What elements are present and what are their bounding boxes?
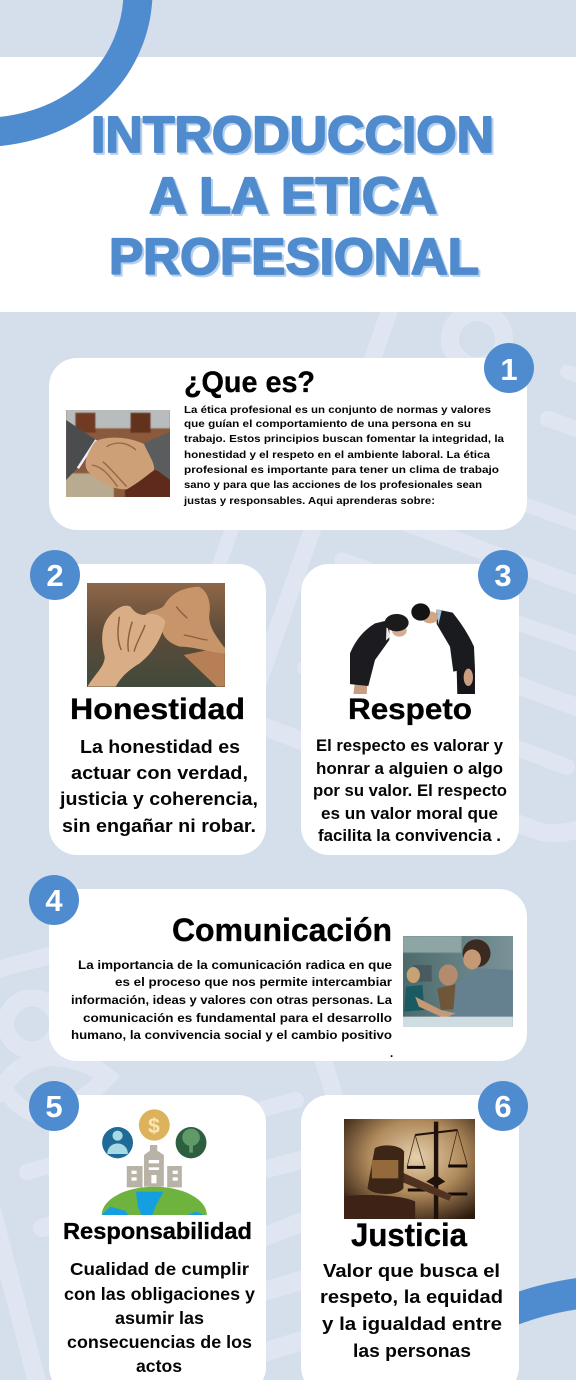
text block: honestidad: justicia y coherencia,: [59, 789, 258, 809]
title: INTRODUCCION: [91, 106, 494, 163]
text block: honestidad: sin engañar ni robar.: [62, 816, 256, 836]
card background: [49, 1095, 266, 1380]
text block: que es: profesional es importante para tener un clima de trabajo: [184, 465, 499, 476]
photo: two people bowing: [349, 603, 475, 695]
top corner arc: [0, 0, 138, 132]
text block: que es: que guían el comportamiento de una persona en su: [184, 419, 471, 430]
text block: justicia: Valor que busca el: [323, 1260, 500, 1281]
title: A LA ETICA: [149, 167, 437, 224]
text block: justicia: las personas: [353, 1340, 471, 1361]
panel: comunicacion: [29, 875, 527, 1061]
text block: responsabilidad: [64, 1259, 255, 1376]
text block: comunicacion: humano, la convivencia social y el cambio positivo: [71, 1030, 392, 1042]
text block: que es: justas y responsables. Aqui aprenderas sobre:: [183, 496, 435, 507]
text block: justicia: [320, 1260, 503, 1361]
card background: [301, 564, 519, 855]
title: [91, 106, 494, 285]
card background: [49, 358, 527, 530]
text block: comunicacion: .: [390, 1048, 393, 1060]
text block: que es: honestidad y el respeto en el ambiente laboral. La ética: [184, 450, 490, 461]
text block: honestidad: La honestidad es: [80, 737, 240, 757]
text block: que es: trabajo. Estos principios buscan fomentar la integridad, la: [184, 434, 504, 445]
text block: respeto: por su valor. El respecto: [313, 782, 507, 800]
panel: que es: [49, 343, 534, 530]
dollar sign: $: [148, 1115, 160, 1138]
badge 6: 6: [494, 1089, 512, 1124]
text block: responsabilidad: Cualidad de cumplir: [70, 1259, 249, 1279]
badge 2: [30, 550, 80, 600]
text block: justicia: respeto, la equidad: [320, 1286, 503, 1307]
text block: comunicacion: comunicación es fundamental para el desarrollo: [83, 1013, 392, 1025]
text block: responsabilidad: actos: [136, 1356, 182, 1376]
badge 6: [478, 1081, 528, 1131]
text block: comunicacion: información, ideas y valores con otras personas. La: [71, 995, 393, 1007]
photo: gavel and scales: [344, 1119, 475, 1219]
badge 5: [29, 1081, 79, 1131]
card background: [49, 564, 266, 855]
photo: pinky promise hands: [87, 583, 225, 687]
text block: respeto: El respecto es valorar y: [316, 737, 504, 755]
text block: responsabilidad: con las obligaciones y: [64, 1284, 255, 1304]
heading: respeto: Respeto: [348, 693, 472, 726]
panel: respeto: [301, 550, 528, 855]
heading: justicia: Justicia: [351, 1217, 467, 1253]
text block: responsabilidad: asumir las: [115, 1308, 204, 1328]
text block: justicia: y la igualdad entre: [322, 1313, 502, 1334]
text block: que es: sano y para que las acciones de los profesionales sean: [184, 480, 482, 491]
badge 3: [478, 550, 528, 600]
heading: comunicacion: Comunicación: [172, 912, 392, 948]
white title band: [0, 57, 576, 312]
text block: que es: [183, 405, 504, 507]
text block: comunicacion: La importancia de la comunicación radica en que: [78, 960, 392, 972]
badge 4: 4: [45, 883, 63, 918]
badge 1: 1: [500, 352, 518, 387]
photo: handshake: [66, 410, 170, 497]
card background: [301, 1095, 519, 1380]
badge 2: 2: [46, 558, 64, 593]
background pattern: [0, 295, 576, 1380]
heading: responsabilidad: Responsabilidad: [63, 1218, 252, 1244]
panel: justicia: [301, 1081, 528, 1380]
text block: respeto: facilita la convivencia .: [318, 827, 501, 845]
panel: honestidad: [30, 550, 266, 855]
text block: que es: La ética profesional es un conjunto de normas y valores: [184, 405, 491, 416]
text block: honestidad: actuar con verdad,: [71, 763, 248, 783]
text block: comunicacion: [71, 960, 393, 1060]
bottom right arc: [490, 1292, 576, 1320]
badge 1: [484, 343, 534, 393]
text block: responsabilidad: consecuencias de los: [67, 1332, 252, 1352]
heading: honestidad: Honestidad: [70, 693, 245, 726]
icon: globe with buildings and circles: [102, 1109, 207, 1215]
panel: responsabilidad: [29, 1081, 266, 1380]
photo: business meeting: [403, 936, 513, 1027]
text block: honestidad: [59, 737, 258, 836]
title: PROFESIONAL: [109, 228, 479, 285]
heading: que es: ¿Que es?: [184, 366, 315, 399]
text block: comunicacion: es el proceso que nos permite intercambiar: [115, 977, 393, 989]
text block: respeto: honrar a alguien o algo: [316, 760, 503, 778]
badge 5: 5: [45, 1089, 63, 1124]
text block: respeto: es un valor moral que: [321, 805, 498, 823]
card background: [49, 889, 527, 1061]
text block: respeto: [313, 737, 507, 845]
badge 4: [29, 875, 79, 925]
badge 3: 3: [494, 558, 512, 593]
